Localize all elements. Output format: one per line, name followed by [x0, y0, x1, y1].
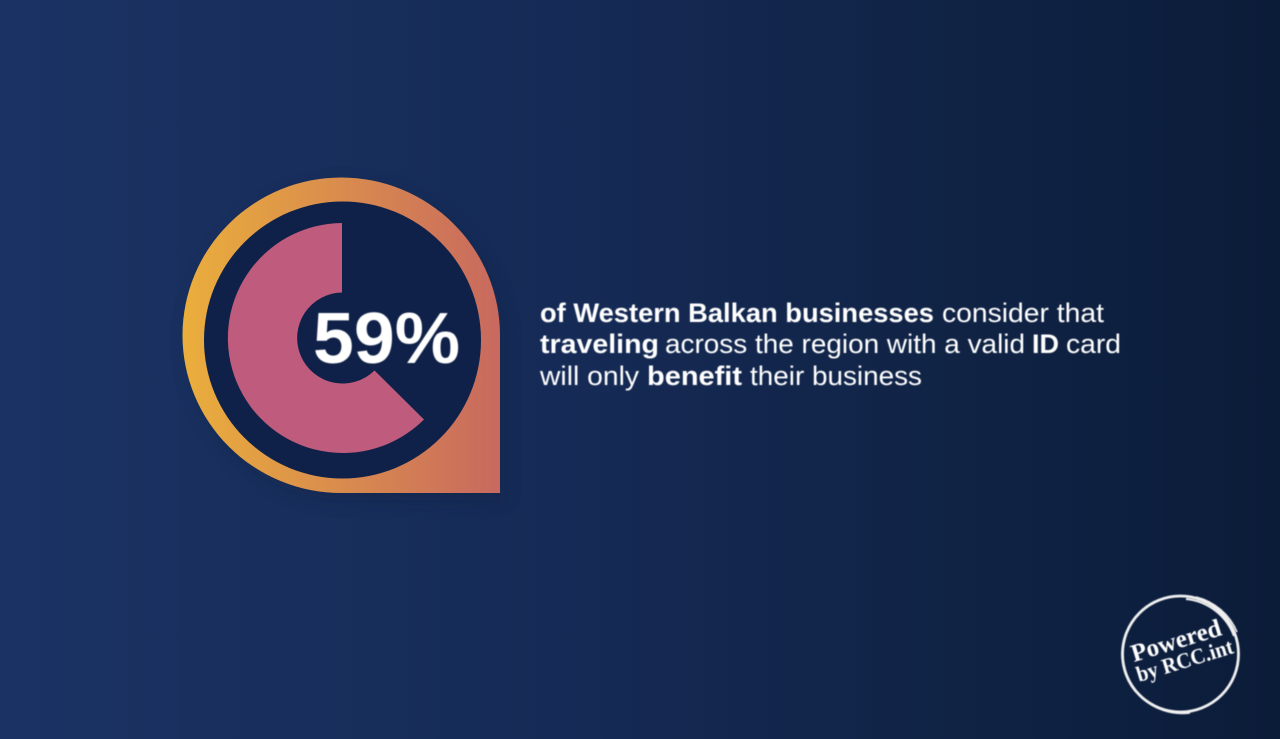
stamp ring — [1122, 596, 1238, 713]
line 2: across the region with a valid — [665, 329, 1025, 359]
description text — [539, 298, 1121, 391]
line 3: benefit — [647, 361, 742, 391]
stamp line 1: Powered — [1128, 615, 1225, 668]
line 1: of Western Balkan businesses — [540, 298, 934, 328]
line 2: ID — [1032, 329, 1059, 359]
stamp line 2: by RCC.int — [1133, 633, 1237, 687]
line 3: will only — [539, 361, 640, 391]
line 2: card — [1066, 329, 1121, 359]
line 2: traveling — [540, 329, 659, 359]
badge shadow — [188, 184, 504, 500]
percentage value: 59% — [313, 299, 460, 379]
donut badge — [182, 178, 504, 500]
stamp: Powered by RCC.int — [1122, 596, 1238, 713]
donut segment: 59% — [228, 223, 424, 453]
teardrop frame — [182, 178, 500, 493]
inner dark circle — [204, 202, 481, 478]
line 1: consider that — [942, 298, 1105, 328]
line 3: their business — [750, 361, 922, 391]
